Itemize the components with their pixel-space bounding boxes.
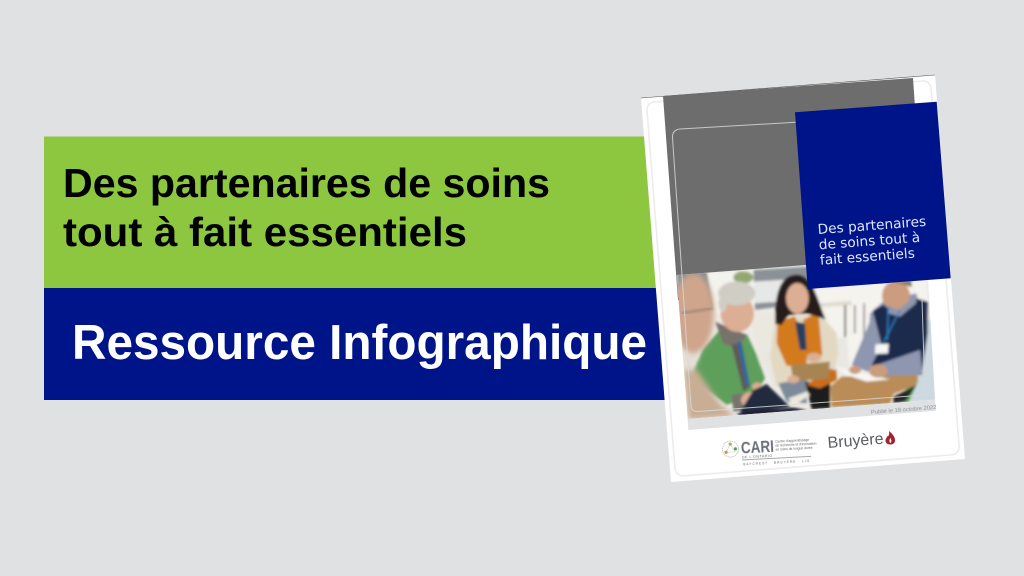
person: man [868, 292, 918, 376]
logo: CARI: en soins de longue durée [775, 446, 813, 452]
cover title text [817, 214, 929, 269]
person: older woman in green jacket [692, 332, 765, 405]
cover title text: fait essentiels [819, 246, 915, 269]
icon: flame [886, 431, 895, 444]
logo: CARI: de recherche et d'innovation [775, 442, 817, 448]
cover photo of care partners [676, 265, 935, 419]
person: right seated [910, 320, 937, 402]
person: woman in orange scarf [770, 313, 838, 387]
cover outer rounded frame [646, 80, 960, 476]
logo emblem [722, 441, 739, 457]
cover grey image panel [663, 78, 927, 300]
panel: blue resource band [44, 288, 669, 400]
cover date strip [688, 400, 937, 430]
title: Des partenaires de soins [63, 160, 550, 206]
logo: Bruyère: Bruyère [827, 431, 884, 452]
cover inner white frame line [672, 122, 925, 412]
cover title text: Des partenaires [817, 214, 927, 238]
background [677, 272, 713, 317]
panel: green title band [44, 136, 669, 288]
logo wordmark: CARI [740, 438, 774, 458]
title: tout à fait essentiels [63, 209, 467, 255]
subtitle: Ressource Infographique [72, 316, 647, 370]
cover title text: de soins tout à [818, 230, 921, 253]
report cover [641, 75, 965, 482]
cover top edge [641, 75, 935, 98]
publication date: Publié le 18 octobre 2022 [871, 405, 937, 416]
logo: CARI: DE L'ONTARIO [742, 454, 773, 459]
logo: CARI: Centre d'apprentissage [775, 438, 809, 444]
logo: CARI: BAYCREST · BRUYÈRE · LIG [743, 458, 810, 466]
title [63, 160, 550, 255]
logo: CARI [722, 436, 818, 467]
cover blue title block [795, 102, 951, 289]
cover page sheet [641, 75, 965, 482]
person: blurred foreground woman [683, 367, 735, 420]
